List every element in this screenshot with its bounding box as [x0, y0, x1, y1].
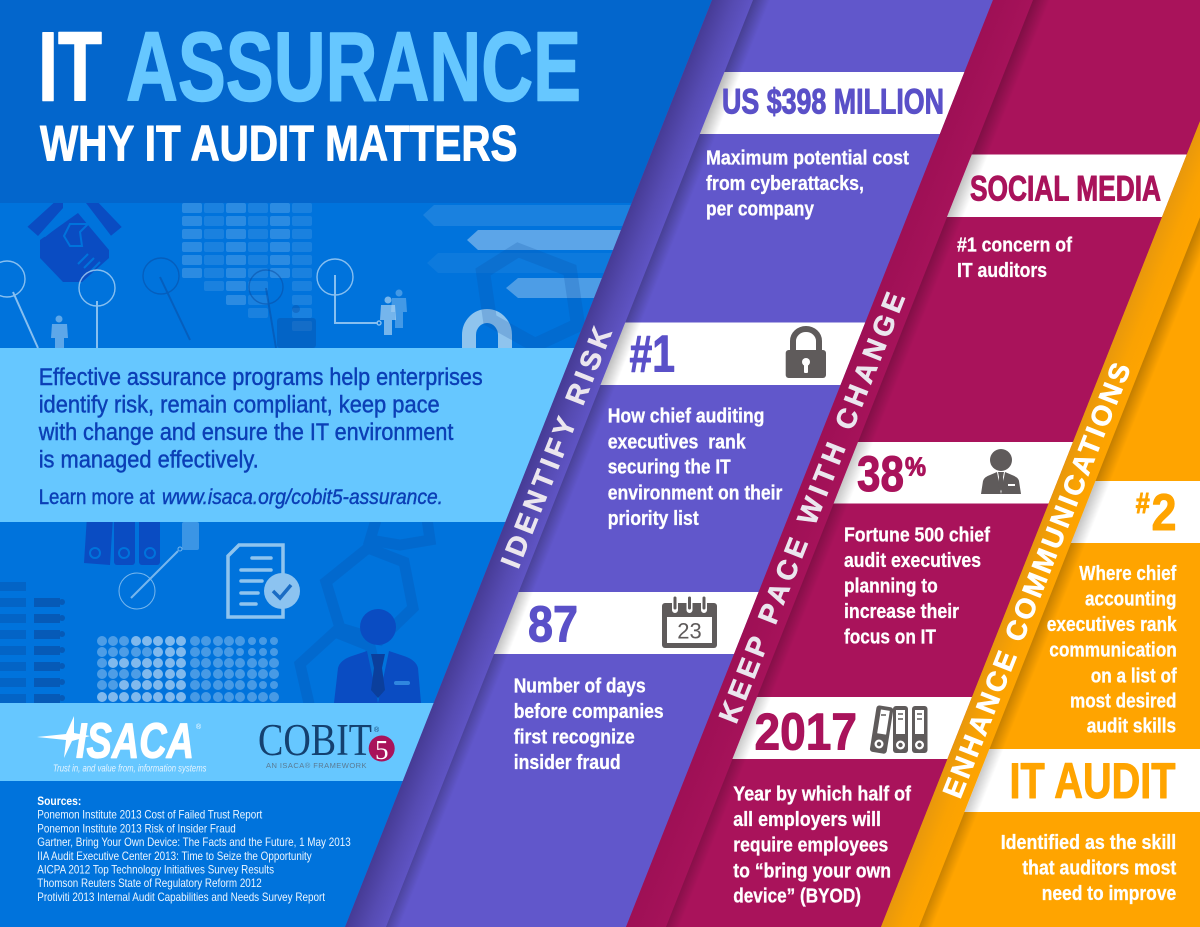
chart: dot matrix right: [190, 636, 279, 702]
text: number of days: [514, 675, 664, 774]
panel: keep pace with change: [626, 0, 1200, 927]
text: where chief accounting: [1047, 562, 1177, 738]
text: year by which: to “bring your own: [733, 859, 891, 882]
white band: #1: [600, 322, 865, 385]
logo: COBIT 5: COBIT: [258, 715, 372, 765]
logo: ISACA: [37, 714, 207, 774]
stat: US $398 million: US $398 MILLION: [722, 82, 944, 122]
logo: ISACA: Trust in, and value from, information systems: [53, 762, 207, 774]
text: identified as the skill: [1001, 831, 1176, 905]
white band: social media: [947, 154, 1187, 217]
text: year by which: all employers will: [733, 808, 881, 831]
stat: #2: 2: [1152, 484, 1176, 542]
panel: enhance communications: [881, 0, 1200, 927]
strip label: enhance communications: ENHANCE COMMUNICATIONS: [937, 358, 1137, 802]
people figures: [51, 290, 407, 348]
text: year by which: device” (BYOD): [733, 884, 861, 907]
stat: 38%: 38: [857, 446, 904, 502]
chart: dot matrix left: [97, 636, 186, 702]
text: chief auditing executives: environment on their: [608, 481, 782, 504]
icon: businessperson: [981, 449, 1021, 494]
text: fortune 500: audit executives: [844, 549, 981, 572]
logo: ISACA: ®: [196, 723, 202, 731]
text: where chief accounting: audit skills: [1087, 715, 1176, 738]
text: #1 concern: IT auditors: [957, 259, 1047, 282]
sources: Ponemon Institute 2013 Cost of Failed Trust Report: [37, 808, 263, 822]
text: where chief accounting: most desired: [1070, 689, 1176, 712]
panel: intro text: identify risk, remain compliant, keep pace: [39, 392, 440, 419]
background imagery: lower technology collage: [0, 490, 430, 720]
background imagery: upper technology collage: [0, 203, 640, 348]
panel: logos: [0, 703, 480, 781]
icon: calendar: [662, 598, 717, 648]
logo: COBIT 5: 5: [375, 735, 388, 765]
sources: Sources:: [37, 794, 81, 808]
text: number of days: before companies: [514, 700, 664, 723]
icon: lock: [786, 329, 826, 378]
text: where chief accounting: communication: [1049, 639, 1177, 662]
text: chief auditing executives: priority list: [608, 507, 699, 530]
text: maximum potential cost: from cyberattacks,: [706, 172, 864, 195]
sources: Ponemon Institute 2013 Risk of Insider Fraud: [37, 821, 236, 835]
text: fortune 500: planning to: [844, 575, 938, 598]
sources: Thomson Reuters State of Regulatory Reform 2012: [37, 876, 262, 890]
sources: AICPA 2012 Top Technology Initiatives Survey Results: [37, 862, 274, 876]
white band: 38%: [834, 442, 1073, 504]
white band: 2017: [732, 697, 972, 759]
panel: intro text: Effective assurance programs help enterprises: [39, 364, 483, 391]
strip label: identify risk: IDENTIFY RISK: [495, 323, 618, 572]
white band: IT audit: [964, 749, 1200, 812]
panel: intro text: with change and ensure the IT environment: [38, 419, 454, 446]
icon: document with check: [228, 545, 300, 617]
hexagons: [300, 490, 430, 720]
text: fortune 500: [844, 524, 990, 648]
panel: intro text: www.isaca.org/cobit5-assurance.: [162, 486, 443, 509]
text: fortune 500: Fortune 500 chief: [844, 524, 990, 547]
pin circle: [119, 547, 182, 609]
header band: [0, 0, 760, 203]
text: maximum potential cost: [706, 146, 909, 220]
businessman figure: [334, 609, 421, 703]
strip label: keep pace with change: KEEP PACE WITH CHANGE: [713, 288, 911, 727]
white band: 87: [494, 592, 759, 654]
white band: US $398 million: [700, 72, 964, 134]
logo: COBIT 5: ®: [374, 726, 380, 734]
sources: IIA Audit Executive Center 2013: Time to Seize the Opportunity: [37, 849, 312, 863]
stat: #2: [1136, 484, 1176, 542]
left-pointing banners: [423, 205, 640, 298]
text: year by which: Year by which half of: [733, 783, 911, 806]
text: number of days: first recognize: [514, 726, 635, 748]
subtitle: WHY IT AUDIT MATTERS: [40, 116, 518, 172]
stat: #2: #: [1136, 488, 1150, 520]
panel: intro text: [0, 348, 600, 522]
chart: block grid: [182, 203, 312, 331]
white band: #2: [1071, 481, 1200, 543]
stat: 87: 87: [528, 596, 578, 652]
text: where chief accounting: on a list of: [1091, 664, 1177, 687]
stat: #1: #1: [630, 326, 675, 384]
rotated people rows: [0, 582, 65, 703]
panel: identify risk: [345, 0, 1010, 927]
text: #1 concern: [957, 234, 1072, 282]
text: fortune 500: focus on IT: [844, 626, 936, 648]
heading: ASSURANCE: ASSURANCE: [126, 11, 581, 121]
text: #1 concern: #1 concern of: [957, 234, 1072, 257]
title: [38, 11, 581, 172]
stat: 2017: 2017: [754, 704, 857, 762]
text: identified as the skill: Identified as the skill: [1001, 831, 1176, 854]
pins and circles: [0, 258, 381, 348]
panel: intro text: is managed effectively.: [39, 446, 259, 473]
text: chief auditing executives: executives rank: [608, 430, 746, 453]
text: where chief accounting: Where chief: [1079, 562, 1176, 585]
text: identified as the skill: need to improve: [1042, 882, 1176, 905]
panel: intro text: Learn more at: [39, 486, 155, 509]
icon: calendar: 23: [677, 618, 702, 644]
text: chief auditing executives: How chief auditing: [608, 404, 764, 428]
icon: handshake: [28, 203, 122, 282]
people figure: [182, 522, 199, 550]
text: number of days: Number of days: [514, 675, 646, 698]
text: maximum potential cost: per company: [706, 198, 814, 220]
text: where chief accounting: accounting: [1085, 588, 1176, 611]
text: chief auditing executives: [608, 404, 782, 530]
logo: ISACA: ISACA: [76, 714, 194, 768]
stat: 38%: %: [905, 452, 926, 482]
text: maximum potential cost: Maximum potential cost: [706, 146, 909, 170]
heading: IT: IT: [38, 11, 102, 121]
logo: COBIT 5: AN ISACA® FRAMEWORK: [266, 761, 366, 770]
sources: [37, 794, 351, 904]
icon: binders: [870, 705, 928, 754]
icon: binders: [84, 500, 160, 565]
lock shackle and hexagon outline: [469, 250, 578, 348]
sources: Gartner, Bring Your Own Device: The Facts and the Future, 1 May 2013: [37, 835, 351, 849]
text: number of days: insider fraud: [514, 751, 621, 774]
text: identified as the skill: that auditors most: [1022, 856, 1176, 879]
text: year by which: require employees: [733, 834, 888, 857]
text: chief auditing executives: securing the IT: [608, 456, 731, 478]
text: year by which: [733, 783, 911, 907]
text: fortune 500: increase their: [844, 600, 959, 623]
sources: Protiviti 2013 Internal Audit Capabilities and Needs Survey Report: [37, 890, 326, 904]
text: where chief accounting: executives rank: [1047, 613, 1177, 636]
